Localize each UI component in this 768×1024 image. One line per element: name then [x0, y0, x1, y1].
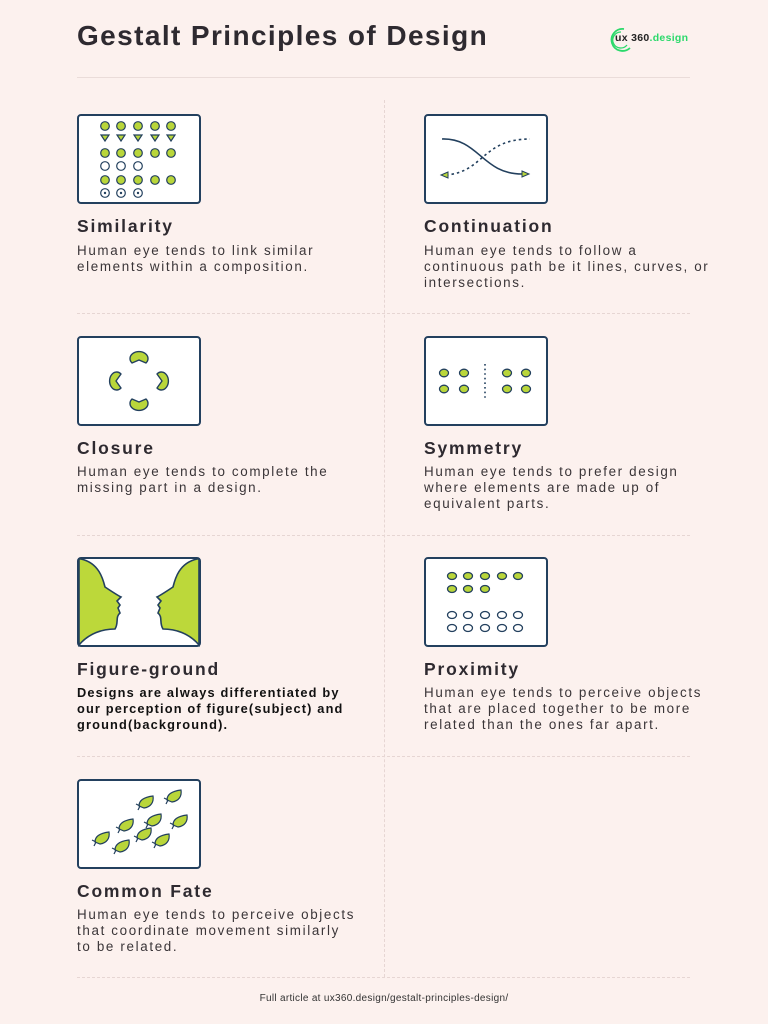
icon: common fate — [77, 779, 201, 869]
title: Gestalt Principles of Design — [77, 20, 488, 51]
panel: closure — [77, 336, 328, 495]
panel: common fate — [77, 779, 355, 954]
text: Human eye tends to follow a — [424, 243, 638, 258]
icon: similarity — [77, 114, 201, 204]
icon: continuation — [424, 114, 548, 204]
heading: Symmetry — [424, 438, 523, 458]
heading: Closure — [77, 438, 155, 458]
text: missing part in a design. — [77, 480, 263, 495]
text: where elements are made up of — [424, 480, 660, 495]
text — [424, 243, 709, 290]
text — [424, 464, 679, 511]
text: intersections. — [424, 275, 526, 290]
footer: Full article at ux360.design/gestalt-principles-design/ — [260, 993, 508, 1004]
logo: ux 360.design — [615, 32, 688, 44]
text: Human eye tends to prefer design — [424, 464, 679, 479]
icon: symmetry — [424, 336, 548, 426]
logo — [610, 28, 688, 52]
text: Designs are always differentiated by — [77, 685, 340, 700]
icon: figure-ground — [77, 557, 201, 647]
text — [77, 685, 344, 732]
text: ground(background). — [77, 717, 228, 732]
panel: proximity — [424, 557, 702, 732]
text: Human eye tends to complete the — [77, 464, 328, 479]
text: Human eye tends to link similar — [77, 243, 314, 258]
text: equivalent parts. — [424, 496, 550, 511]
text: continuous path be it lines, curves, or — [424, 259, 709, 274]
panel: similarity — [77, 114, 314, 274]
heading: Common Fate — [77, 881, 213, 901]
heading: Similarity — [77, 216, 174, 236]
text — [424, 685, 702, 732]
text — [77, 907, 355, 954]
heading: Figure-ground — [77, 659, 220, 679]
text — [77, 464, 328, 495]
text: Human eye tends to perceive objects — [77, 907, 355, 922]
heading: Continuation — [424, 216, 554, 236]
panel: figure-ground — [77, 557, 344, 732]
icon: closure — [77, 336, 201, 426]
text: elements within a composition. — [77, 259, 309, 274]
text: Human eye tends to perceive objects — [424, 685, 702, 700]
text: related than the ones far apart. — [424, 717, 660, 732]
heading: Proximity — [424, 659, 520, 679]
icon: proximity — [424, 557, 548, 647]
text: to be related. — [77, 939, 178, 954]
panel: symmetry — [424, 336, 679, 511]
text: our perception of figure(subject) and — [77, 701, 344, 716]
text: that are placed together to be more — [424, 701, 691, 716]
text: that coordinate movement similarly — [77, 923, 340, 938]
panel: continuation — [424, 114, 709, 290]
text — [77, 243, 314, 274]
